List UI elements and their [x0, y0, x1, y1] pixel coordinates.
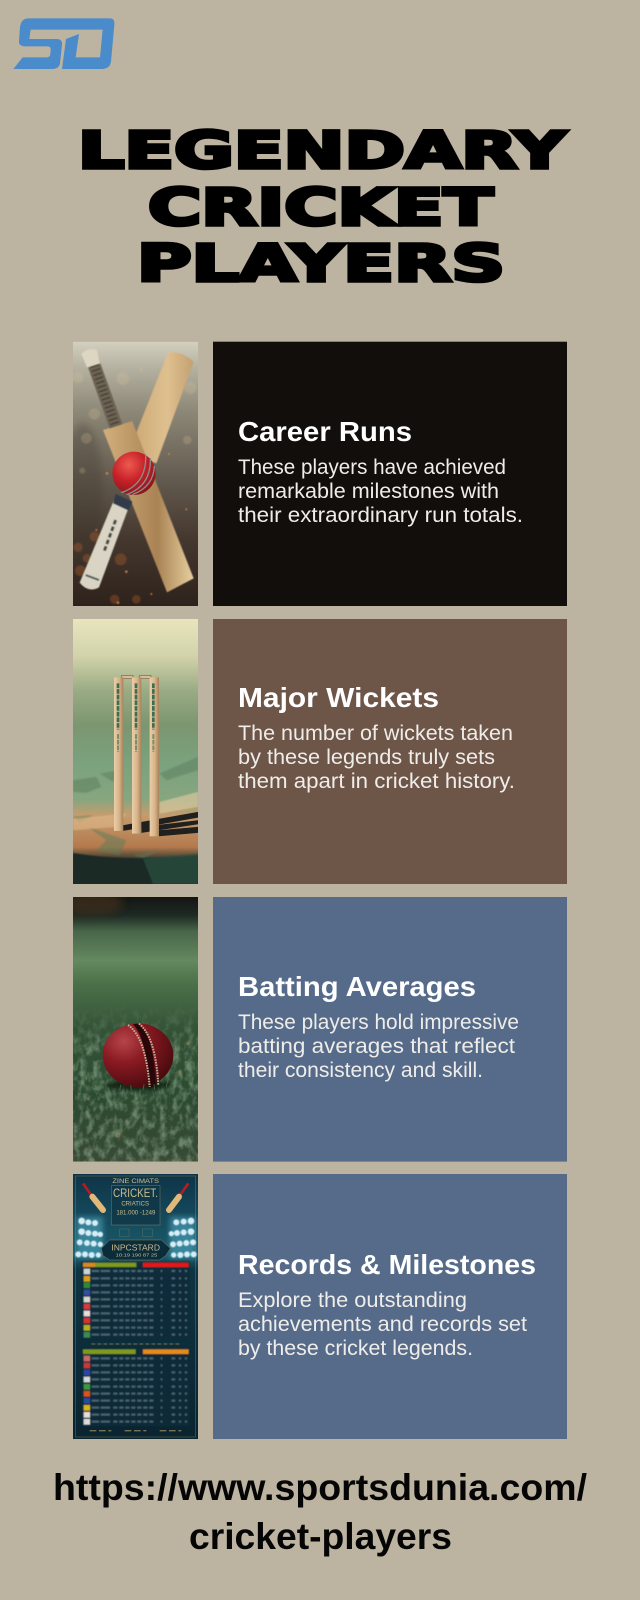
poster title: ZINE CIMATS	[112, 1178, 159, 1185]
image: crossed cricket bats and ball	[73, 342, 198, 606]
card: batting averages	[213, 897, 567, 1162]
grass texture	[73, 1004, 198, 1162]
bails	[122, 675, 151, 679]
description: career runs: their extraordinary run totals.	[238, 504, 523, 527]
bat blade left	[103, 421, 194, 592]
website url	[53, 1467, 587, 1557]
website url: cricket-players	[189, 1516, 452, 1557]
description: batting averages: their consistency and skill.	[238, 1059, 483, 1082]
poster footer	[90, 1429, 181, 1433]
bat blade right	[128, 352, 194, 463]
heading: major wickets: Major Wickets	[238, 682, 439, 713]
description: batting averages: batting averages that reflect	[238, 1035, 515, 1058]
card: records and milestones	[213, 1174, 567, 1439]
description: career runs: These players have achieved	[238, 456, 506, 479]
stump markings	[118, 683, 153, 752]
image: wooden stumps on pitch	[73, 619, 198, 884]
stumps	[114, 677, 159, 836]
heading: records and milestones: Records & Milestones	[238, 1249, 536, 1280]
panel: records and milestones	[73, 1174, 567, 1439]
panel: major wickets	[73, 619, 567, 884]
poster bats	[83, 1183, 188, 1210]
title: LEGENDARY	[78, 121, 568, 180]
heading: batting averages: Batting Averages	[238, 971, 476, 1002]
stadium light glow	[76, 1217, 196, 1258]
description: records and milestones: achievements and records set	[238, 1313, 527, 1336]
image: red ball on grass	[73, 897, 198, 1162]
table 2	[81, 1348, 190, 1426]
description: major wickets: The number of wickets taken	[238, 722, 513, 745]
poster banner	[101, 1229, 170, 1260]
cricket ball	[103, 1023, 173, 1088]
poster title: 181.000 -1249	[116, 1210, 156, 1217]
poster banner: INPCSTARD	[111, 1242, 160, 1252]
description: major wickets	[238, 722, 515, 793]
card: major wickets	[213, 619, 567, 884]
description: major wickets: them apart in cricket history.	[238, 770, 515, 793]
image: cricket stats poster	[73, 1174, 198, 1439]
description: records and milestones	[238, 1289, 527, 1360]
description: batting averages	[238, 1011, 519, 1082]
poster title: CRICKET.	[113, 1186, 158, 1200]
red ball	[112, 452, 156, 495]
ball shadow	[105, 1080, 171, 1091]
description: career runs	[238, 456, 523, 527]
description: records and milestones: by these cricket legends.	[238, 1337, 473, 1360]
stump shadows	[123, 812, 198, 836]
website url: https://www.sportsdunia.com/	[53, 1467, 587, 1508]
white handle	[80, 494, 132, 589]
ornament	[91, 1342, 181, 1346]
title	[78, 121, 568, 293]
title: CRICKET	[148, 178, 494, 237]
poster title: CRIATICS	[121, 1202, 149, 1208]
description: records and milestones: Explore the outstanding	[238, 1289, 467, 1312]
description: batting averages: These players hold impressive	[238, 1011, 519, 1034]
description: major wickets: by these legends truly sets	[238, 746, 495, 769]
card: career runs	[213, 342, 567, 606]
poster banner: 10:19 190 87 25	[116, 1252, 158, 1257]
panel: batting averages	[63, 892, 567, 1162]
heading: career runs: Career Runs	[238, 416, 412, 447]
title: PLAYERS	[137, 234, 505, 293]
description: career runs: remarkable milestones with	[238, 480, 499, 503]
stadium lights	[75, 1218, 197, 1258]
panel: career runs	[63, 342, 567, 606]
table 1	[81, 1262, 190, 1340]
bat grip	[81, 349, 122, 428]
logo: SD	[13, 18, 114, 69]
poster title	[111, 1178, 160, 1225]
